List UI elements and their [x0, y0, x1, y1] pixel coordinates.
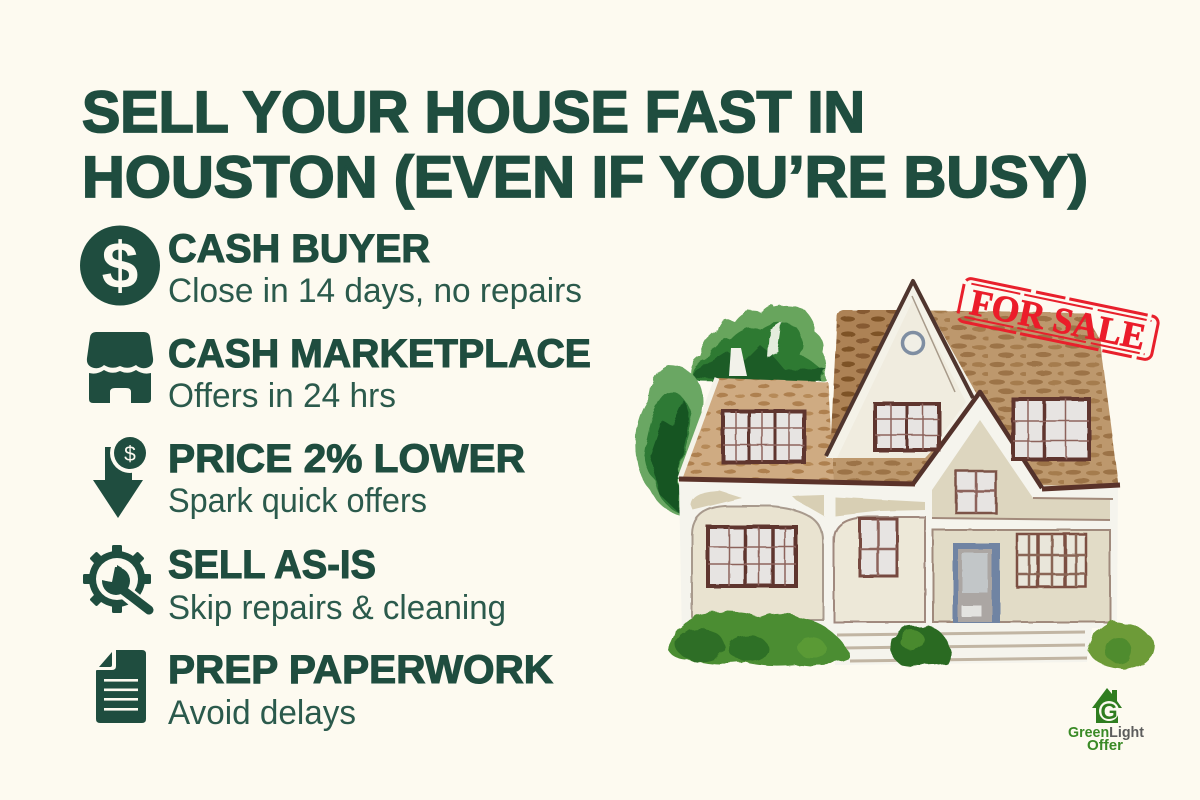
item: sell as-is [83, 543, 506, 627]
icon: dollar coin [80, 226, 160, 306]
house illustration [635, 281, 1154, 669]
back roof [830, 310, 1119, 486]
icon: document [96, 650, 146, 723]
item: price lower: PRICE 2% LOWER [168, 437, 525, 481]
logo [1068, 688, 1144, 754]
big gable [826, 281, 980, 458]
middle window [860, 519, 897, 576]
roof window right [1013, 399, 1089, 459]
item: prep paperwork: PREP PAPERWORK [168, 648, 553, 692]
windows [708, 399, 1089, 587]
walls [679, 482, 1118, 665]
right lower window [1017, 534, 1086, 587]
stamp: for sale: FOR SALE [966, 282, 1149, 359]
item: sell as-is: Skip repairs & cleaning [168, 589, 506, 627]
title: SELL YOUR HOUSE FAST IN [82, 80, 865, 145]
item: prep paperwork [96, 648, 553, 732]
gable window [875, 404, 939, 450]
item: cash buyer: Close in 14 days, no repairs [168, 272, 582, 310]
logo house: G [1100, 699, 1118, 724]
item: price lower: Spark quick offers [168, 482, 427, 520]
item: sell as-is: SELL AS-IS [168, 543, 376, 587]
item: cash marketplace [87, 332, 591, 415]
logo: Offer [1087, 737, 1123, 754]
lower left window [708, 527, 796, 586]
left roof [680, 378, 834, 484]
round attic window [902, 332, 924, 354]
icon: gear and wrench [83, 545, 151, 613]
title [82, 80, 1088, 210]
icon: storefront [87, 332, 153, 403]
porch steps [837, 632, 1087, 661]
item: price lower [93, 433, 525, 520]
door [953, 543, 1000, 623]
title: HOUSTON (EVEN IF YOU’RE BUSY) [82, 145, 1088, 210]
item: prep paperwork: Avoid delays [168, 694, 356, 732]
front gable [913, 392, 1113, 520]
roof window left [723, 411, 804, 462]
icon: price down arrow [93, 433, 150, 518]
item: cash buyer: CASH BUYER [168, 227, 430, 271]
eave lines [679, 479, 1120, 489]
logo: GreenLight [1068, 724, 1144, 741]
wall panels [691, 491, 1110, 622]
icon: dollar coin: $ [102, 228, 138, 302]
front gable window [956, 471, 996, 513]
icon: price down arrow: $ [124, 443, 136, 466]
trees [635, 305, 826, 515]
item: cash marketplace: CASH MARKETPLACE [168, 332, 591, 376]
item: cash marketplace: Offers in 24 hrs [168, 377, 396, 415]
item: cash buyer [80, 226, 582, 310]
chimney [729, 348, 747, 376]
bushes [668, 612, 1154, 669]
